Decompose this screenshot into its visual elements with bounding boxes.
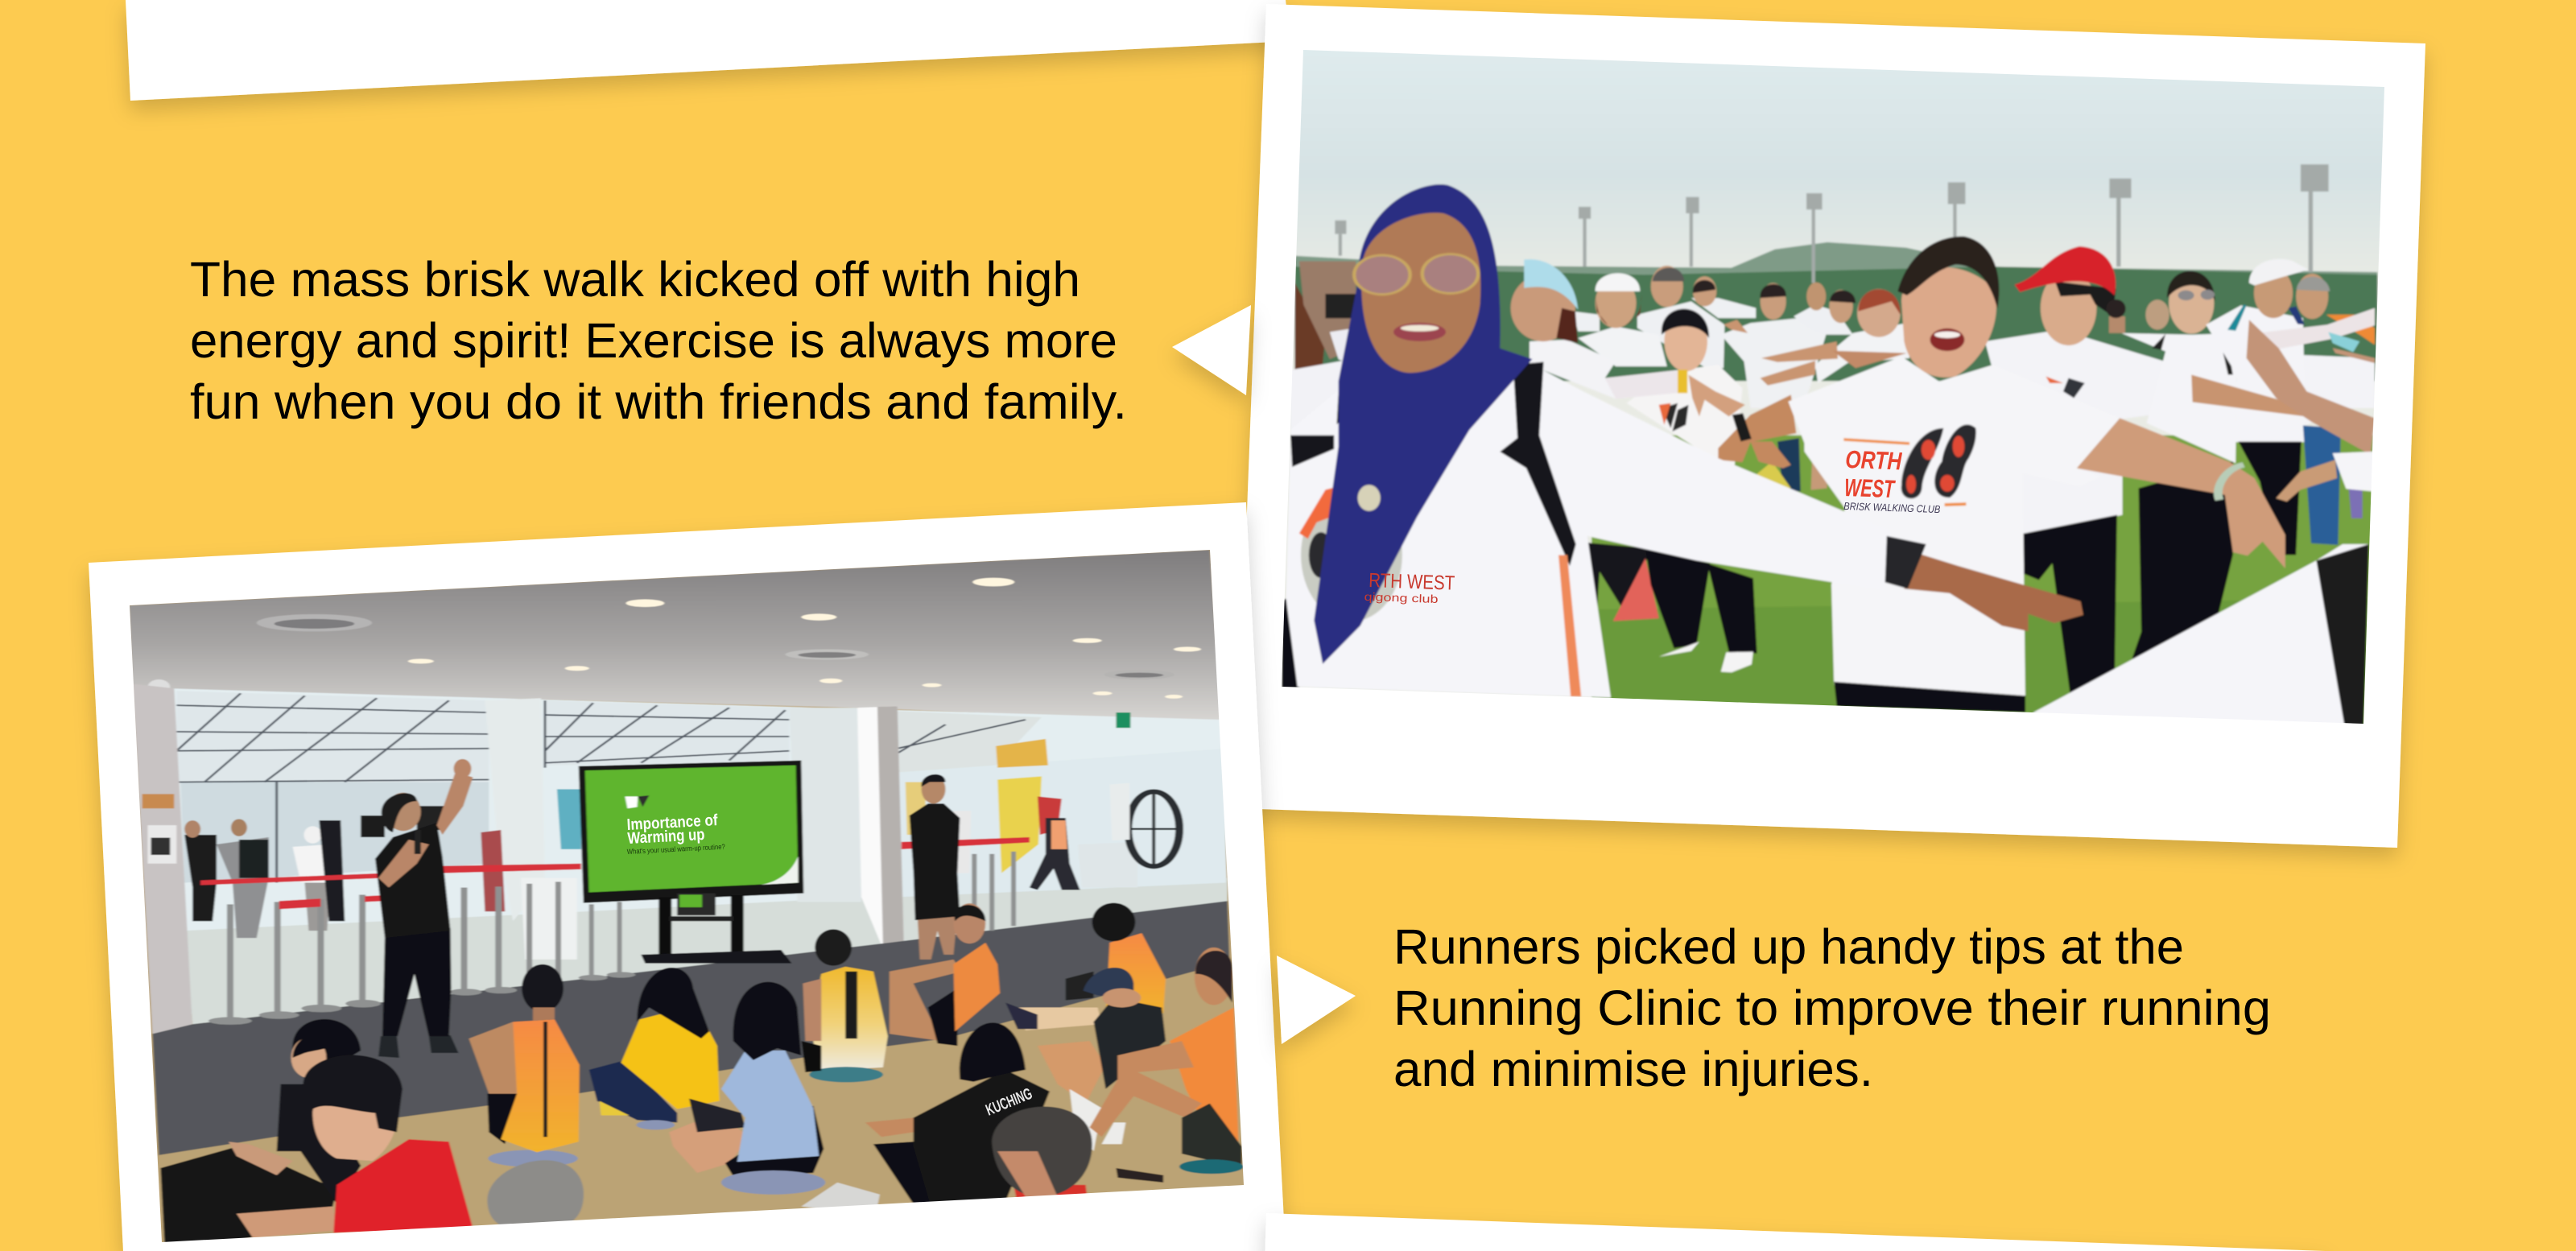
slide and shirt text: Warming up [627, 826, 705, 848]
shirt text: RTH WEST [1368, 569, 1455, 595]
text block: running clinic caption: Runners picked up handy tips at the [1393, 919, 2184, 974]
screen: warming-up slide [579, 761, 803, 903]
slide and shirt text [626, 811, 1035, 1120]
text block: mass brisk walk caption: energy and spirit! Exercise is always more [190, 313, 1117, 368]
shirt text: ORTH [1845, 445, 1902, 475]
stanchions [208, 852, 1016, 1025]
right windows [996, 739, 1048, 768]
seated right group [1005, 903, 1244, 1183]
carpet and floor [152, 901, 1230, 1156]
blue shirt woman [669, 982, 825, 1195]
shirt text: WEST [1844, 473, 1897, 503]
shirt text [1364, 445, 1942, 606]
red cap woman [1985, 330, 2164, 535]
slide and shirt text: Importance of [626, 811, 718, 834]
slide and shirt text: What's your usual warm-up routine? [627, 843, 725, 856]
Kuching runner [801, 1022, 1050, 1209]
white cap man and right side [2295, 355, 2375, 426]
centre runner [1718, 394, 1796, 462]
curtains and pillars [485, 698, 545, 921]
panel: top-left white card [126, 0, 1290, 101]
text block: mass brisk walk caption: The mass brisk walk kicked off with high [190, 252, 1080, 307]
background people left [184, 806, 505, 938]
orange singlet man [469, 964, 580, 1167]
left woman hijab [1282, 184, 2083, 698]
foreground shoulder [2033, 544, 2369, 726]
venue [105, 543, 1250, 1247]
arrow: pointing left to caption [1172, 305, 1251, 395]
glasses woman [2121, 332, 2238, 464]
red shirt man [237, 1055, 473, 1237]
crowd behind the centre runner [1511, 237, 2375, 712]
photo: mass brisk walk group exercising [1260, 33, 2413, 740]
girl in front [1627, 365, 1742, 469]
text block: running clinic caption: Running Clinic to improve their running [1393, 981, 2271, 1035]
man foreground right [992, 1107, 1092, 1204]
panel: bottom-right white card [1264, 1213, 2325, 1251]
standing man in black [910, 774, 960, 960]
shirt text: BRISK WALKING CLUB [1843, 500, 1941, 515]
text block: running clinic caption: and minimise injuries. [1393, 1042, 1873, 1096]
visor woman [1528, 338, 1615, 398]
seated back row [801, 903, 1000, 1082]
slide and shirt text: KUCHING [984, 1085, 1035, 1120]
panel: mass brisk walk photo card [1236, 4, 2425, 848]
grey-haired man [487, 1160, 584, 1225]
photo: running clinic session [105, 543, 1250, 1247]
arrow: pointing right to caption [1277, 956, 1356, 1044]
legs, bags [1587, 541, 1649, 607]
panel: running clinic photo card [89, 502, 1286, 1251]
text block: mass brisk walk caption: fun when you do it with friends and family. [190, 374, 1127, 429]
back row [1573, 312, 1600, 332]
shirt text: qigong club [1364, 590, 1439, 605]
speaker in black [375, 759, 473, 1058]
ceiling vents and lights [147, 578, 1201, 728]
woman and backpack left [160, 1019, 361, 1245]
yellow shirt woman [589, 968, 720, 1129]
